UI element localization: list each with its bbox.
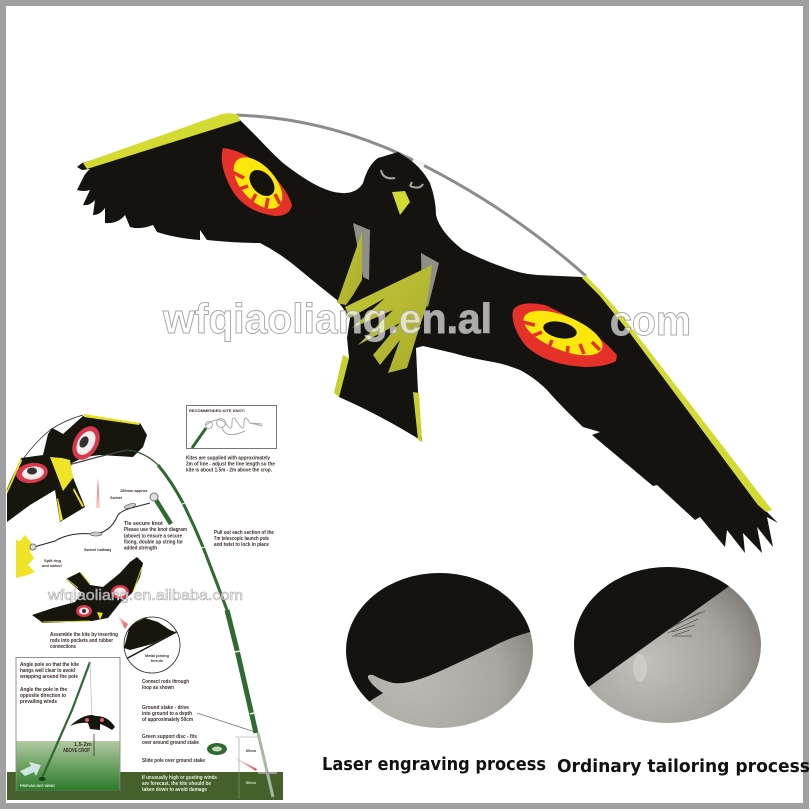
left foot [337, 232, 362, 305]
assemble text: Assemble the kite by inserting [50, 632, 118, 638]
line assembly detail [16, 488, 171, 578]
eye left [15, 461, 49, 485]
pole lower section [227, 610, 277, 797]
watermark: main: wfqiaoliang.en.al [162, 295, 492, 342]
red callout pointer [117, 615, 128, 629]
ground stake leader [197, 713, 255, 732]
line assembly detail: Swivel halfway [84, 547, 112, 552]
frayed threads [660, 611, 705, 636]
inset kite [70, 715, 115, 730]
ferrule detail circle: ferrule [151, 658, 164, 663]
line assembly detail: Swivel [110, 495, 122, 500]
ferrule detail circle [124, 617, 180, 673]
ground stake text [142, 705, 193, 723]
ground stake text: of approximately 50cm [142, 717, 193, 723]
wind warning text: If unusually high or gusting winds [142, 775, 217, 781]
connect rods text: Connect rods through [142, 679, 189, 685]
line assembly detail: and swivel [42, 563, 62, 568]
connect rods text [142, 679, 189, 691]
dimension lines: 50cm [246, 780, 256, 785]
watermark: com: com [610, 297, 691, 344]
pole base [38, 777, 46, 781]
dimension lines [235, 737, 257, 799]
inset: pole angle [16, 658, 120, 790]
inset text: prevailing winds [20, 699, 57, 705]
small kite feet [50, 457, 73, 491]
launch pole [127, 450, 227, 610]
secure knot text: Tie secure knot [124, 521, 163, 527]
support disc [207, 743, 227, 755]
yellow edges [7, 414, 140, 521]
knot drawing [192, 418, 263, 448]
instruction diagram [7, 406, 283, 800]
bird eyes [381, 170, 423, 188]
laser engraving sample [346, 573, 533, 728]
slide pole text: Slide pole over ground stake [142, 758, 205, 764]
assemble text: rods into pockets and rubber [50, 638, 113, 644]
telescopic pole text: and twist to lock in place [214, 542, 269, 548]
inset text [19, 662, 79, 705]
right wing yellow edge [582, 275, 772, 512]
small watermark: wfqiaoliang.en.alibaba.com [47, 587, 243, 604]
inset text: Angle the pole in the [20, 687, 67, 693]
dimension lines: 60cm [246, 748, 256, 753]
tail right yellow edge [413, 392, 422, 442]
ground stake text: into ground to a depth [142, 711, 192, 717]
assembly kite yellow edges [43, 567, 142, 622]
kite body silhouette [77, 118, 778, 553]
telescopic pole text [214, 530, 274, 548]
wing rod [236, 115, 586, 276]
secure knot text: (above) to ensure a secure [124, 534, 182, 540]
support disc text [142, 734, 199, 746]
left wing eye marking [222, 148, 292, 217]
assembly kite [32, 557, 143, 623]
secure knot text [124, 521, 187, 552]
assembly kite eye lower [76, 605, 92, 617]
secure knot text: fixing, double up string for [124, 540, 183, 546]
assemble text [50, 632, 118, 650]
grey rod pockets [353, 223, 439, 307]
left wing yellow edge [83, 113, 240, 169]
red pointer [96, 478, 100, 508]
inset string [90, 662, 92, 722]
beak [392, 191, 410, 215]
main kite [77, 113, 778, 553]
inset text: wrapping around the pole [19, 674, 78, 680]
knot caption: 2m of line - adjust the line length so the [186, 462, 275, 468]
small kite with arc [7, 414, 147, 522]
prevailing wind label: PREVAILING WIND [20, 783, 55, 788]
wind warning text: are forecast, the kite should be [142, 781, 211, 787]
tail yellow edges [334, 355, 349, 397]
line assembly detail: 150mm approx [120, 488, 148, 493]
telescopic pole text: 7m telescopic launch pole [214, 536, 269, 542]
assembly kite silhouette [32, 557, 143, 623]
inset height label: 1.5-2m [74, 742, 92, 748]
wind arrow [20, 762, 41, 776]
inset text: Angle pole so that the kite [20, 662, 79, 668]
wind warning text [142, 775, 217, 793]
knot box [186, 406, 276, 448]
connect rods text: loop as shown [142, 685, 174, 691]
fabric shine [633, 654, 647, 682]
assembly kite beak [97, 612, 103, 620]
assembly kite eye upper [111, 585, 129, 599]
ordinary tailoring sample [574, 567, 761, 723]
knot caption: kite is about 1.5m - 2m above the crop. [186, 468, 272, 474]
knot title: RECOMMENDED KITE KNOT: [189, 408, 245, 413]
secure knot text: Please use the knot diagram [124, 527, 187, 533]
ground band [7, 772, 283, 800]
kite silhouette [7, 416, 147, 522]
ferrule detail circle: Metal joining [145, 653, 170, 658]
assemble text: connections [50, 644, 76, 650]
inset pole [42, 662, 90, 778]
support disc text: over around ground stake [142, 740, 199, 746]
inset height label [63, 734, 94, 756]
rod white section [413, 160, 424, 166]
support disc text: Green support disc - fits [142, 734, 197, 740]
ground stake text: Ground stake - drive [142, 705, 189, 711]
inset height label: ABOVE CROP [63, 748, 90, 754]
label: laser: Laser engraving process [322, 754, 546, 775]
wind warning text: taken down to avoid damage [142, 787, 207, 793]
telescopic pole text: Pull out each section of the [214, 530, 274, 536]
inset text: opposite direction to [20, 693, 67, 699]
eye right [67, 421, 105, 465]
arc line [7, 415, 83, 490]
chain to kite [72, 450, 127, 464]
knot caption [186, 456, 275, 474]
knot caption: Kites are supplied with approximately [186, 456, 270, 462]
right wing eye marking [512, 302, 617, 367]
right foot [345, 265, 432, 373]
secure knot text: added strength [124, 546, 157, 552]
line assembly detail: Split ring [44, 558, 61, 563]
disc pointer [230, 755, 257, 771]
inset text: hangs well clear to avoid [20, 668, 75, 674]
